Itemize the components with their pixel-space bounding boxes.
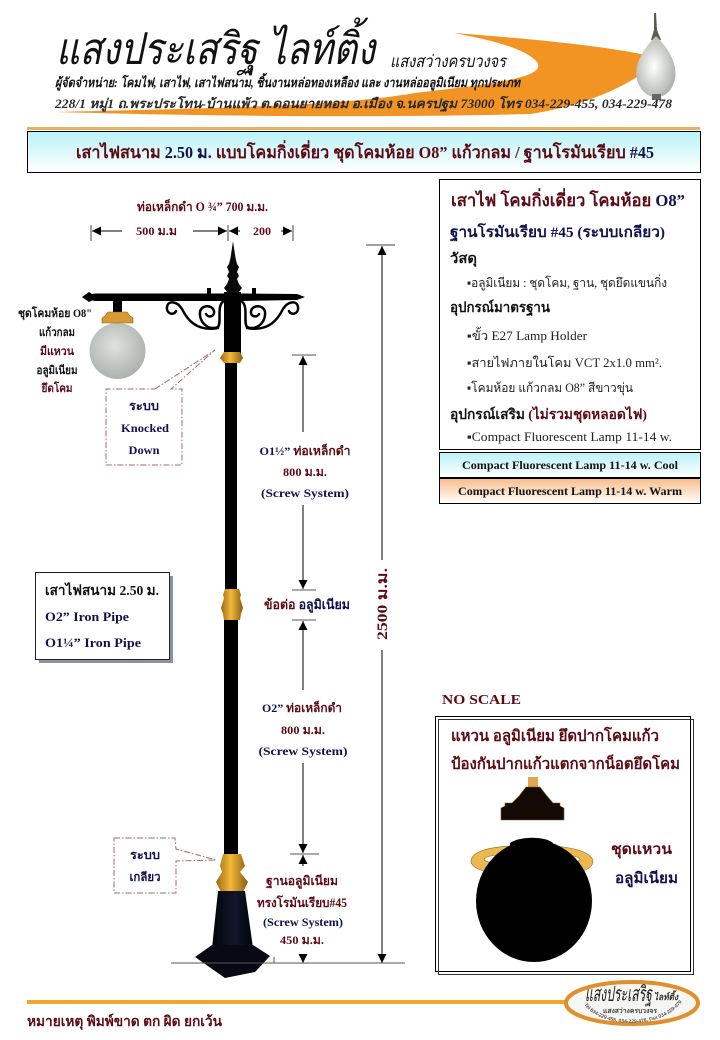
logo: แสงสว่างครบวงจร xyxy=(603,1007,657,1015)
footer rule xyxy=(27,1000,567,1004)
lamp label: แก้วกลม xyxy=(39,326,75,339)
legend box: O1¼” Iron Pipe xyxy=(45,636,141,650)
base dimension: ฐานอลูมิเนียม xyxy=(266,874,338,889)
pipe dimension 2 xyxy=(258,621,348,854)
slogan: แสงสว่างครบวงจร xyxy=(390,52,508,71)
base cone xyxy=(212,891,253,948)
legend box: O2” Iron Pipe xyxy=(45,610,129,624)
ring detail panel: อลูมิเนียม xyxy=(615,869,678,888)
callout: knocked down xyxy=(106,350,215,465)
glass globe with ring xyxy=(471,838,593,962)
spec panel: ▪ขั้ว E27 Lamp Holder xyxy=(467,326,588,343)
joint label: ข้อต่อ อลูมิเนียม xyxy=(264,597,350,613)
logo xyxy=(564,980,700,1026)
callout: screw system xyxy=(114,838,216,893)
knock-down collar xyxy=(220,352,243,363)
200 label: 200 xyxy=(253,224,271,238)
base dimension: ทรงโรมันเรียบ#45 xyxy=(257,895,347,910)
footer note: หมายเหตุ พิมพ์ขาด ตก ผิด ยกเว้น xyxy=(27,1013,222,1030)
spec panel: ▪อลูมิเนียม : ชุดโคม, ฐาน, ชุดยึดแขนกิ่ง xyxy=(467,274,667,291)
hex foot xyxy=(195,945,270,978)
legend box xyxy=(36,572,173,663)
pipe dimension 1: O1½” ท่อเหล็กดำ xyxy=(260,443,350,458)
lamp label: ยึดโคม xyxy=(41,380,72,395)
lamp label: ชุดโคมห้อย O8" xyxy=(18,305,92,321)
materials: วัสดุ xyxy=(450,251,477,267)
spec panel: ▪Compact Fluorescent Lamp 11-14 w. xyxy=(467,430,672,444)
arm studs xyxy=(207,288,256,295)
lamp label: อลูมิเนียม xyxy=(36,364,78,378)
globe xyxy=(90,323,146,379)
lamp label xyxy=(18,305,92,395)
base collar xyxy=(216,854,248,892)
base dimension: 450 ม.ม. xyxy=(280,933,324,947)
callout: screw system: เกลียว xyxy=(130,870,161,884)
option: warm xyxy=(440,478,700,504)
standard equipment: อุปกรณ์มาตรฐาน xyxy=(450,299,550,317)
lamp post xyxy=(82,241,305,978)
logo: Tel 034-229-455, 034-229-478, Fax 034-229-479 xyxy=(584,1000,682,1023)
no scale note: NO SCALE xyxy=(442,693,521,708)
gold cap xyxy=(102,312,133,323)
hanging globe lamp xyxy=(90,300,146,379)
pipe dimension 2: (Screw System) xyxy=(258,744,348,758)
icon: globe lamp xyxy=(636,13,676,100)
ring detail panel xyxy=(436,716,694,974)
orange swoosh xyxy=(55,33,645,116)
main pole xyxy=(225,363,237,593)
option: warm: Compact Fluorescent Lamp 11-14 w. Warm xyxy=(458,484,682,498)
distributor line: ผู้จัดจำหน่าย: โคมไฟ, เสาไฟ, เสาไฟสนาม, ชิ้นงานหล่อทองเหลือง และ งานหล่ออลูมิเนียม ทุกประเภท xyxy=(55,72,521,91)
lamp cap xyxy=(501,777,564,820)
pipe dimension 1: (Screw System) xyxy=(261,486,349,500)
callout: screw system: ระบบ xyxy=(130,848,160,862)
optional equipment: อุปกรณ์เสริม (ไม่รวมชุดหลอดไฟ) xyxy=(450,405,647,423)
title box xyxy=(28,132,700,172)
joint xyxy=(221,589,243,620)
callout: knocked down: ระบบ xyxy=(129,399,159,413)
title text: เสาไฟสนาม 2.50 ม. แบบโคมกิ่งเดี่ยว ชุดโคมห้อย O8” แก้วกลม / ฐานโรมันเรียบ #45 xyxy=(76,140,654,164)
callout: knocked down: Knocked xyxy=(121,421,169,435)
upper pole xyxy=(224,292,241,354)
ring detail panel: ป้องกันปากแก้วแตกจากน็อตยึดโคม xyxy=(451,753,680,773)
pipe dimension 2: O2” ท่อเหล็กดำ xyxy=(262,700,342,715)
detail heading: แหวน อลูมิเนียม ยึดปากโคมแก้ว xyxy=(451,726,659,747)
lamp label: มีแหวน xyxy=(40,345,74,358)
header banner xyxy=(54,13,676,116)
callout: knocked down: Down xyxy=(128,443,160,457)
pipe dimension 2: 800 ม.ม. xyxy=(281,723,325,737)
logo: แสงประเสริฐ xyxy=(585,983,653,1007)
pipe dimension 1 xyxy=(260,355,350,620)
finial xyxy=(224,241,242,292)
top dimension xyxy=(91,199,293,241)
address line: 228/1 หมู่1 ถ.พระประโทน-บ้านแพ้ว ต.ดอนยายหอม อ.เมือง จ.นครปฐม 73000 โทร 034-229-455, 034-229-478 xyxy=(54,95,673,113)
arm pipe label: ท่อเหล็กดำ O ¾” 700 ม.ม. xyxy=(137,199,268,214)
overall height dimension xyxy=(171,245,405,963)
pipe dimension 1: 800 ม.ม. xyxy=(283,465,327,479)
company name: แสงประเสริฐ ไลท์ติ้ง xyxy=(56,17,378,76)
base dimension xyxy=(257,855,347,963)
option: cool: Compact Fluorescent Lamp 11-14 w. Cool xyxy=(462,458,679,472)
ring label: ชุดแหวน xyxy=(611,842,673,859)
logo: ไลท์ติ้ง xyxy=(654,990,679,1002)
spec panel: ▪สายไฟภายในโคม VCT 2x1.0 mm². xyxy=(467,355,662,370)
arm xyxy=(82,292,305,302)
scrolls xyxy=(167,301,298,329)
2500 label: 2500 ม.ม. xyxy=(375,568,391,640)
legend box: เสาไฟสนาม 2.50 ม. xyxy=(45,581,159,599)
base dimension: (Screw System) xyxy=(263,915,343,929)
500 label: 500 ม.ม xyxy=(136,224,177,238)
header rule xyxy=(27,127,700,130)
spec panel: ▪โคมห้อย แก้วกลม O8” สีขาวขุ่น xyxy=(467,380,633,396)
spec title: เสาไฟ โคมกิ่งเดี่ยว โคมห้อย O8” xyxy=(451,188,685,210)
option: cool xyxy=(440,452,700,478)
spec panel xyxy=(440,180,700,450)
spec subtitle: ฐานโรมันเรียบ #45 (ระบบเกลียว) xyxy=(450,222,665,242)
